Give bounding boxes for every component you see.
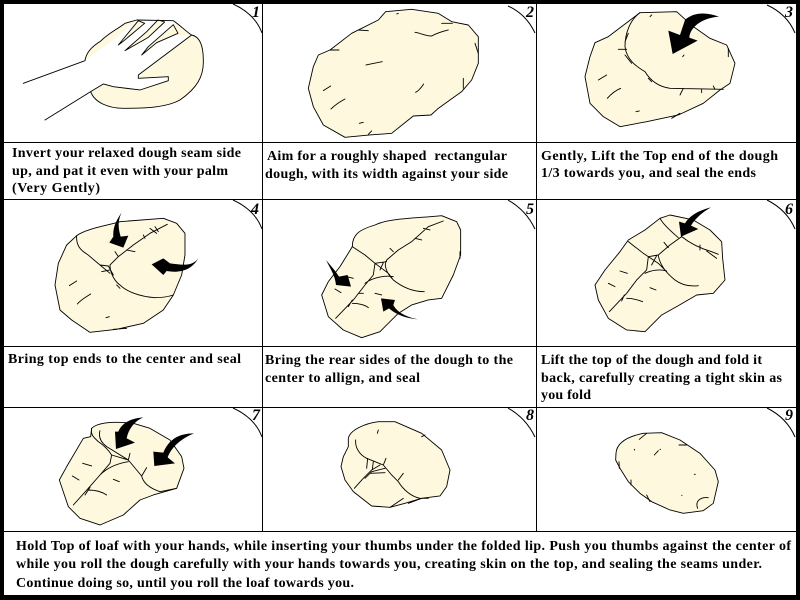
illustration: rolling the loaf [341, 422, 450, 507]
panel: step 1 [12, 4, 262, 196]
step 3 number tab [767, 4, 795, 33]
illustration: top ends to center [55, 212, 198, 332]
step 5 number tab [508, 200, 535, 229]
bottom instructions: Hold Top of loaf with your hands, while inserting your thumbs under the folded lip. Push you thumbs against the center of [16, 539, 791, 554]
panel: step 3 [541, 4, 795, 181]
arrows [109, 212, 198, 275]
step 4 caption: Bring top ends to the center and seal [8, 352, 241, 367]
panel: step 9 [616, 407, 795, 513]
step 2 caption [265, 149, 508, 182]
step 6 number tab [767, 200, 795, 229]
panel: step 7 [59, 407, 262, 525]
step 1 caption [12, 146, 241, 196]
step 7 number tab [233, 407, 262, 437]
step 5 caption: Bring the rear sides of the dough to the [265, 353, 513, 368]
step 1 caption: Invert your relaxed dough seam side [12, 146, 241, 161]
step 5 number tab: 5 [526, 201, 534, 218]
panel: step 8 [341, 407, 535, 507]
bottom instructions: while you roll the dough carefully with your hands towards you, creating skin on the top, and sealing the seams under. [16, 557, 762, 572]
step 8 number tab: 8 [526, 407, 534, 424]
step 2 number tab [508, 4, 535, 33]
step 4 number tab [233, 200, 262, 229]
illustration: top third folded [585, 12, 735, 127]
arrows [326, 260, 418, 319]
step 6 caption [541, 353, 783, 403]
step 9 number tab: 9 [785, 407, 793, 424]
illustration: thumbs under folded lip [59, 417, 194, 525]
step 5 caption [265, 353, 513, 386]
panel: step 4 [8, 200, 262, 367]
step 2 caption: dough, with its width against your side [265, 167, 508, 182]
step 6 caption: you fold [541, 388, 591, 403]
step 6 caption: back, carefully creating a tight skin as [541, 371, 783, 386]
illustration: top folded back [595, 207, 725, 332]
step 1 caption: (Very Gently) [12, 181, 100, 196]
illustration: rough rectangular dough [308, 9, 478, 137]
step 8 number tab [508, 407, 535, 437]
illustration: hand patting dough [23, 20, 203, 120]
panel: step 6 [541, 200, 795, 403]
bottom instructions [16, 539, 791, 591]
step 7 number tab: 7 [252, 407, 261, 424]
illustration: finished loaf [616, 433, 718, 513]
step 6 number tab: 6 [785, 201, 793, 218]
step 4 number tab: 4 [250, 201, 259, 218]
step 1 caption: up, and pat it even with your palm [12, 164, 228, 179]
step 5 caption: center to allign, and seal [265, 371, 420, 386]
step 3 caption: Gently, Lift the Top end of the dough [541, 149, 778, 164]
step 3 caption [541, 149, 778, 181]
step 2 number tab: 2 [525, 4, 534, 21]
arrow [668, 13, 719, 54]
step 6 caption: Lift the top of the dough and fold it [541, 353, 762, 368]
step 1 number tab: 1 [252, 4, 260, 21]
panel: step 2 [265, 4, 535, 182]
step 3 caption: 1/3 towards you, and seal the ends [541, 166, 757, 181]
panel: step 5 [265, 200, 535, 386]
arrow [679, 207, 711, 237]
step 2 caption: Aim for a roughly shaped rectangular [267, 149, 507, 164]
illustration: rear sides to center [322, 216, 461, 338]
bottom instructions: Continue doing so, until you roll the loaf towards you. [16, 576, 354, 591]
arrows [115, 417, 194, 466]
step 1 number tab [233, 4, 262, 33]
step 3 number tab: 3 [784, 4, 793, 21]
step 9 number tab [767, 407, 795, 437]
